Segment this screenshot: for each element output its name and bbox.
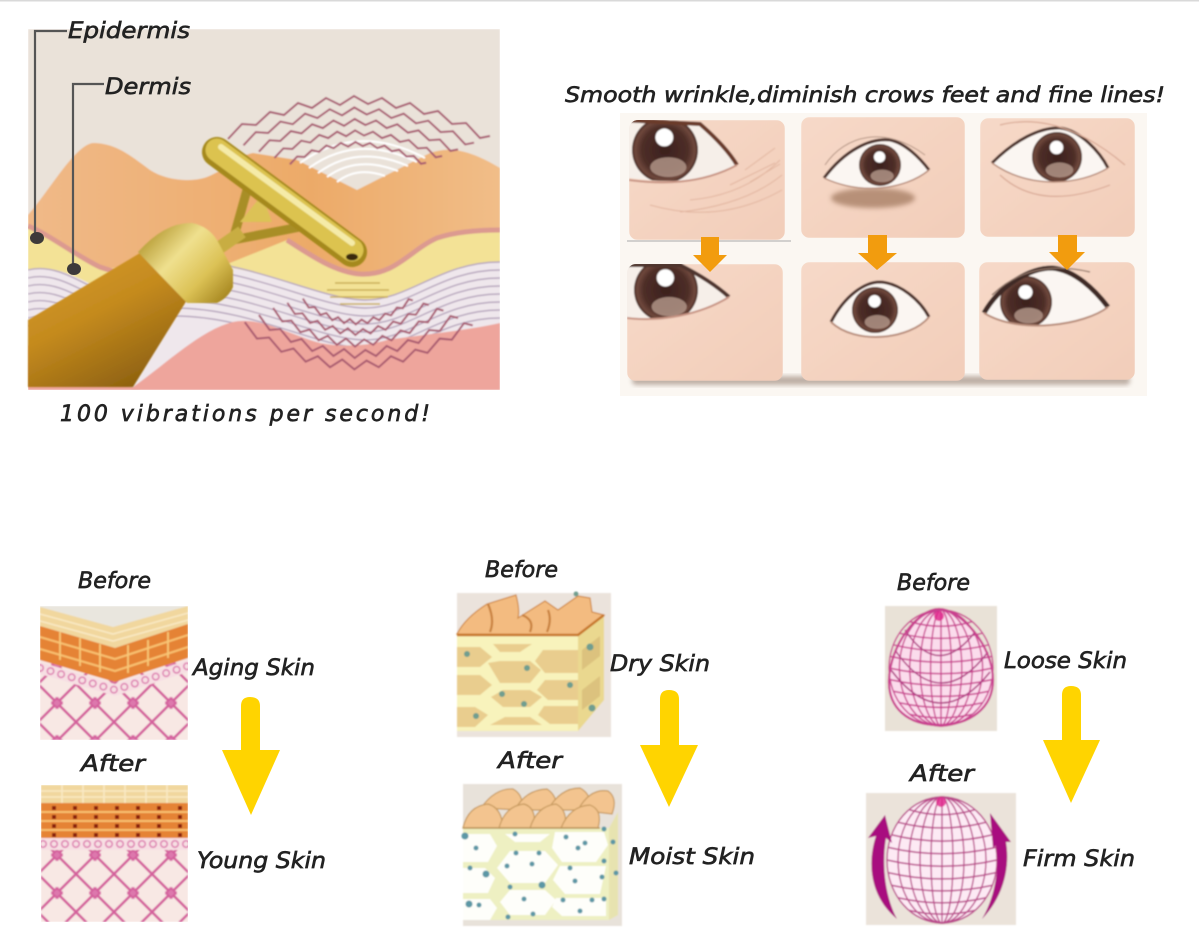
column: loose to firm skin <box>866 571 1135 925</box>
label: moist skin: Moist Skin <box>629 845 755 870</box>
heading: wrinkle claim: Smooth wrinkle,diminish crows feet and fine lines! <box>565 83 1165 107</box>
arrow: left upward curve <box>868 815 897 919</box>
label: before: Before <box>485 558 558 583</box>
label: after: After <box>79 752 147 777</box>
photo: wrinkled eye before <box>620 115 785 240</box>
label: dry skin: Dry Skin <box>610 652 710 677</box>
panel: eye before and after photos <box>620 113 1147 396</box>
caption: vibrations: 100 vibrations per second! <box>60 402 430 427</box>
skin layers illustration <box>28 29 500 395</box>
arrow: yellow down <box>222 697 280 815</box>
label: Dermis <box>67 75 191 275</box>
illustration: aging skin <box>40 606 188 740</box>
illustration: moist skin <box>462 784 622 926</box>
photo: smooth eye after one <box>620 258 783 381</box>
label: young skin: Young Skin <box>197 849 326 874</box>
column: aging to young skin <box>40 569 326 922</box>
photo: smooth eye after two <box>801 262 965 381</box>
arrow: right upward curve <box>982 813 1011 919</box>
photo: smooth eye after three <box>979 262 1135 380</box>
label: Epidermis <box>30 19 190 244</box>
illustration: young skin <box>41 785 188 922</box>
label: loose skin: Loose Skin <box>1004 649 1127 674</box>
illustration: firm skin lattice <box>866 793 1016 925</box>
photo: fine line eye before <box>980 118 1135 237</box>
label: aging skin: Aging Skin <box>191 656 315 681</box>
arrow: yellow down <box>640 690 698 807</box>
label: Dermis: Dermis <box>105 75 191 100</box>
arrow: eye one <box>693 237 727 272</box>
label: before: Before <box>897 571 970 596</box>
label: after: After <box>496 749 564 774</box>
arrow: eye two <box>858 235 897 270</box>
label: Epidermis: Epidermis <box>68 19 190 44</box>
illustration: loose skin lattice <box>885 606 997 731</box>
photo: dark circle eye before <box>801 117 965 238</box>
arrow: yellow down <box>1043 686 1100 803</box>
gold T-bar wand <box>28 147 358 387</box>
illustration: dry skin <box>457 592 611 737</box>
panel: vibration diagram <box>28 19 500 427</box>
label: after: After <box>908 762 976 787</box>
column: dry to moist skin <box>457 558 755 926</box>
label: before: Before <box>78 569 151 594</box>
label: firm skin: Firm Skin <box>1023 847 1135 872</box>
arrow: eye three <box>1049 235 1085 270</box>
